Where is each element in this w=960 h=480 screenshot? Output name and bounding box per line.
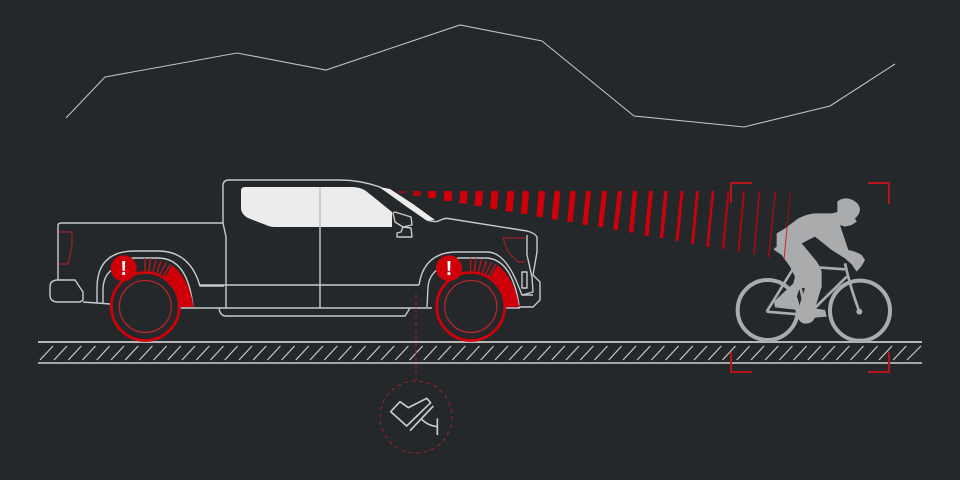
- bed and cab: [58, 180, 540, 308]
- rear fender alert: [111, 255, 194, 307]
- last beam slice over cyclist: [784, 191, 790, 260]
- detection frame: [731, 183, 889, 372]
- mirror: [393, 212, 412, 227]
- camera icon: [380, 381, 452, 453]
- taillight: [59, 232, 72, 264]
- door divider in window: [319, 187, 321, 227]
- headlight: [503, 238, 525, 262]
- grille and bumper: [522, 235, 533, 295]
- body lower line: [180, 307, 432, 309]
- door divider: [319, 227, 321, 308]
- rear fender alert: !: [120, 258, 127, 280]
- rear bumper: [50, 280, 110, 304]
- sill line: [200, 284, 419, 286]
- road: [38, 342, 922, 363]
- rear wheel: [111, 272, 179, 340]
- front fender alert: [436, 255, 519, 307]
- rocker panel: [219, 308, 410, 316]
- lower mirror mount: [397, 227, 412, 237]
- front arch: [419, 252, 533, 307]
- truck outline: [50, 180, 540, 316]
- horizon line: [66, 25, 895, 127]
- radar beam: [402, 191, 776, 258]
- front wheel: [437, 272, 505, 340]
- dashed leader line: [415, 294, 417, 381]
- window: [241, 187, 392, 227]
- windshield: [380, 187, 435, 220]
- rear arch: [97, 251, 224, 307]
- front fender alert: !: [446, 258, 452, 280]
- cyclist: [738, 198, 890, 341]
